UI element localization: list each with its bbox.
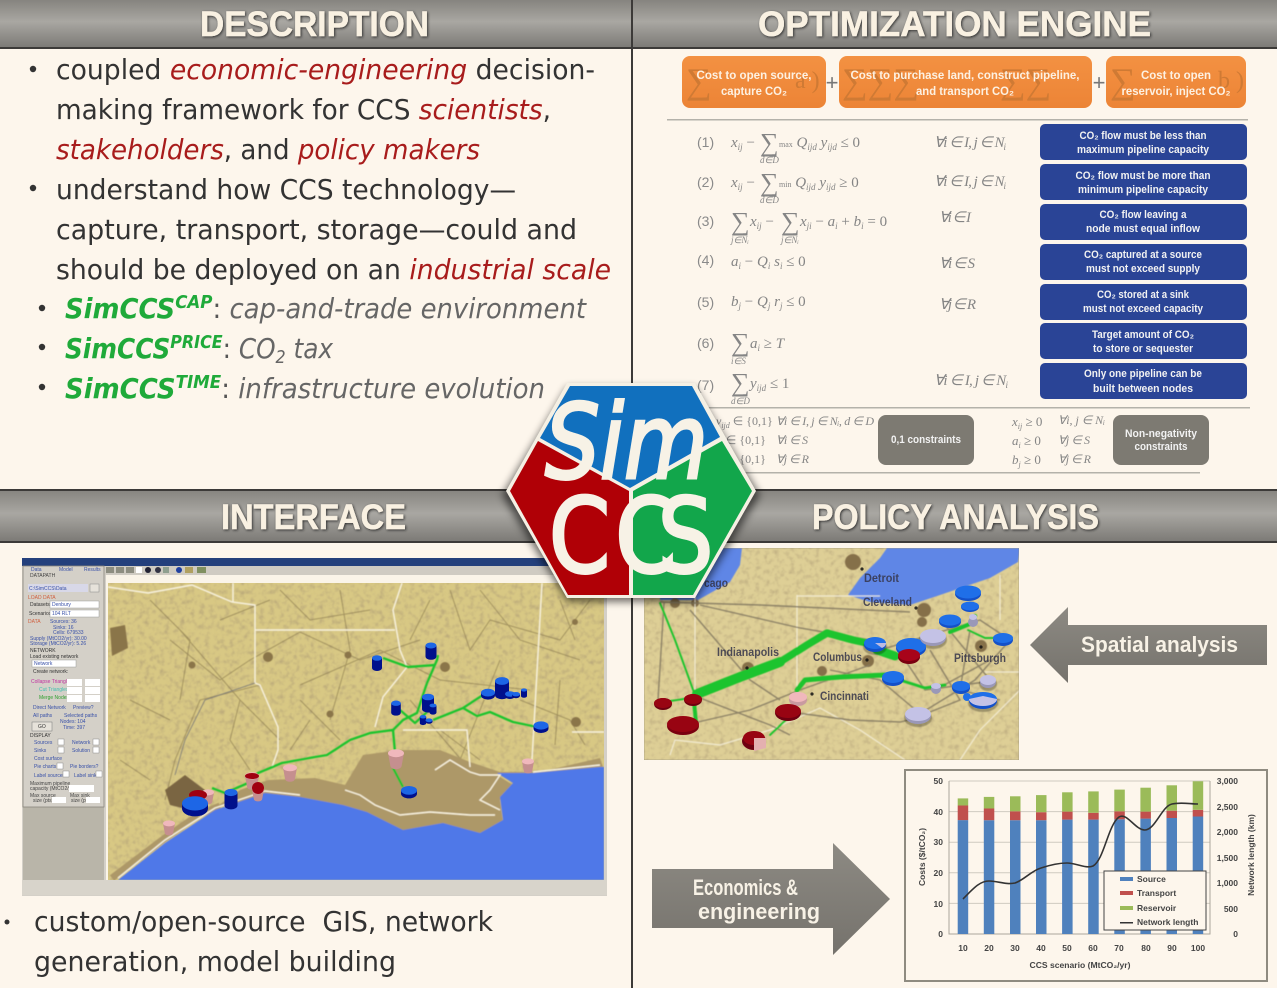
control panel: Pie charts xyxy=(34,764,57,770)
constraint equations: ji xyxy=(806,221,812,231)
axis titles: CCS scenario (MtCO₂/yr) xyxy=(1030,960,1131,970)
control panel: Pie borders? xyxy=(70,764,99,770)
constraint equations: s xyxy=(770,254,780,270)
left axis labels: 40 xyxy=(934,807,943,817)
constraint equations: ≤ 0 xyxy=(782,254,806,270)
control panel: Sources xyxy=(34,740,53,746)
constraint equations: b xyxy=(731,294,738,310)
control panel: size (pts): xyxy=(33,798,55,804)
constraint equations: i xyxy=(835,221,838,231)
constraint explanation boxes: CO₂ captured at a source xyxy=(1084,249,1202,261)
control panel: Solution xyxy=(72,748,90,754)
control panel: Cut Triangles xyxy=(39,687,69,693)
binary and non-negativity constraints: x xyxy=(1012,414,1018,429)
constraint equations: x xyxy=(750,214,757,230)
control panel: Denbury xyxy=(52,602,71,608)
control panel: Preview? xyxy=(73,705,94,711)
objective function cost boxes: ∑∑∑ xyxy=(842,61,919,101)
binary and non-negativity constraints: i xyxy=(721,440,723,449)
constraint equations: ∀i ∈ I, j ∈ N xyxy=(934,373,1006,389)
panel: description text: CO xyxy=(239,332,276,365)
header bar: policy analysis xyxy=(633,489,1277,543)
control panel: Sources: 36 xyxy=(50,619,77,625)
control panel: Max sink xyxy=(70,793,90,799)
objective function cost boxes: + xyxy=(1093,70,1105,95)
panel: description text: coupled economic-engineering decision- xyxy=(56,53,595,86)
control panel: Load existing network xyxy=(30,654,79,660)
constraint equations: j∈Nᵢ xyxy=(780,235,799,245)
legend: Reservoir xyxy=(1137,903,1177,913)
objective function cost boxes: ∑ xyxy=(686,61,712,101)
binary and non-negativity constraints: s xyxy=(716,433,721,447)
control panel: Time: 397 xyxy=(63,725,85,731)
constraint equations: ≥ 0 xyxy=(836,175,859,191)
constraint explanation boxes: maximum pipeline capacity xyxy=(1077,144,1210,156)
control panel: LOAD DATA xyxy=(28,595,56,601)
constraint equations: ijd xyxy=(827,142,837,152)
control panel: DISPLAY xyxy=(30,733,51,739)
axis titles xyxy=(917,814,1256,970)
stacked bars xyxy=(958,781,1203,934)
constraint equations: max Q xyxy=(779,135,807,151)
control panel: Results xyxy=(84,567,101,573)
right axis labels: 2,000 xyxy=(1217,827,1238,837)
control panel: capacity (MtCO2/yr): xyxy=(30,786,76,792)
right axis labels: 1,000 xyxy=(1217,878,1238,888)
arrow: spatial analysis xyxy=(1030,607,1267,683)
constraint equations: ∀i ∈ I, j ∈ N xyxy=(934,174,1004,190)
arrow: economics and engineering: engineering xyxy=(698,899,820,924)
control panel: Network xyxy=(72,740,91,746)
control panel: Merge Nodes xyxy=(39,695,70,701)
constraint explanation boxes: node must equal inflow xyxy=(1086,223,1200,235)
constraint equations: ij xyxy=(757,221,762,231)
constraint equations: ≤ 0 xyxy=(837,135,860,151)
constraint equations: y xyxy=(750,376,757,392)
constraint explanation boxes: CO₂ flow leaving a xyxy=(1100,209,1187,221)
logo wordmark: CCS xyxy=(549,476,713,597)
panel: description text: : xyxy=(223,332,239,365)
constraint equations: a xyxy=(750,336,758,352)
constraint equations: ∑ xyxy=(731,368,750,397)
right axis labels: 3,000 xyxy=(1217,776,1238,786)
source and sink markers xyxy=(163,642,548,835)
control panel: Selected paths xyxy=(64,713,98,719)
legend: Network length xyxy=(1137,917,1198,927)
constraint equations: ij xyxy=(738,142,743,152)
binary and non-negativity constraints: ∀j ∈ R xyxy=(776,452,810,466)
binary and non-negativity constraints: ≥ 0 xyxy=(1022,414,1042,429)
legend: Source xyxy=(1137,874,1166,884)
control panel: Data xyxy=(31,567,42,573)
panel: description text: capture, transport, storage—could and xyxy=(56,213,577,246)
constraint equations: − xyxy=(741,254,757,270)
objective function cost boxes: ∑∑ xyxy=(1000,61,1051,101)
interface description text xyxy=(4,905,494,978)
constraint equations xyxy=(697,128,1008,406)
cost label: reservoir: Cost to open xyxy=(1141,68,1211,82)
constraint equations: min Q xyxy=(779,175,806,191)
control panel: Storage (MtCO2/yr): 5.26 xyxy=(30,641,86,647)
control panel: DATA xyxy=(28,619,41,625)
constraint equations: i xyxy=(1003,181,1006,191)
binary and non-negativity constraints: a xyxy=(1012,433,1018,448)
constraint equations: ij xyxy=(738,182,743,192)
constraint equations: − xyxy=(762,214,774,230)
control panel: Supply (MtCO2/yr): 30.00 xyxy=(30,636,87,642)
binary and non-negativity constraints: ijd xyxy=(721,421,731,430)
panel: description text: making framework for CCS scientists, xyxy=(56,93,551,126)
binary and non-negativity constraints: ∀i ∈ S xyxy=(776,433,808,447)
control panel: Create network: xyxy=(33,669,68,675)
control panel: DATAPATH xyxy=(30,573,56,579)
objective function cost boxes: a ) xyxy=(795,68,820,94)
binary and non-negativity constraints: ≥ 0 xyxy=(1021,433,1041,448)
x axis labels: 100 xyxy=(1191,943,1205,953)
non-negativity constraints box: constraints xyxy=(1134,441,1188,453)
constraint equations: (1) xyxy=(697,134,714,150)
panel: description text: TIME xyxy=(176,372,222,393)
x axis labels: 90 xyxy=(1167,943,1177,953)
panel: description text: understand how CCS technology— xyxy=(56,173,516,206)
constraint explanation boxes: built between nodes xyxy=(1093,383,1193,395)
constraint equations: ∀i ∈ I xyxy=(939,210,972,226)
panel: description text: SimCCS xyxy=(65,372,176,405)
constraint equations: (5) xyxy=(697,294,714,310)
constraint equations: x xyxy=(731,135,738,151)
constraint equations: x xyxy=(800,214,807,230)
control panel: GO xyxy=(38,724,46,730)
constraint equations: ∀j ∈ R xyxy=(939,297,976,313)
control panel: Cells: 679533 xyxy=(53,630,84,636)
control panel: All paths xyxy=(33,713,53,719)
constraint equations: j∈Nᵢ xyxy=(730,235,749,245)
constraint equations: d∈D xyxy=(760,195,779,205)
right axis labels: 2,500 xyxy=(1217,802,1238,812)
axis titles: Costs ($/tCO₂) xyxy=(917,828,927,886)
arrow: economics and engineering: Economics & xyxy=(693,875,798,900)
map: spatial analysis Ohio valley xyxy=(643,547,1020,761)
control panel: Network xyxy=(34,661,53,667)
left axis labels: 30 xyxy=(934,837,943,847)
heading: interface: INTERFACE xyxy=(221,498,406,537)
x axis labels: 20 xyxy=(984,943,994,953)
x axis labels: 70 xyxy=(1114,943,1124,953)
x axis labels: 60 xyxy=(1088,943,1098,953)
panel: description text xyxy=(30,53,611,405)
logo wordmark xyxy=(545,383,713,597)
constraint equations: + xyxy=(838,214,854,230)
constraint equations: i xyxy=(738,261,742,271)
control panel xyxy=(23,566,104,807)
x axis labels: 10 xyxy=(958,943,968,953)
city labels: Indianapolis xyxy=(717,645,779,659)
control panel: Label sources xyxy=(34,773,66,779)
map: Gulf Coast network xyxy=(108,583,604,880)
control panel: 104 RLT xyxy=(52,611,71,617)
constraint equations: ≤ 0 xyxy=(782,294,806,310)
constraint equations: ∀i ∈ I, j ∈ N xyxy=(934,135,1004,151)
objective function cost boxes: + xyxy=(826,70,838,95)
heading: optimization engine: OPTIMIZATION ENGINE xyxy=(758,5,1151,44)
constraint equations: − xyxy=(812,214,828,230)
constraint explanation boxes: to store or sequester xyxy=(1093,343,1194,355)
binary and non-negativity constraints: ∀i ∈ I, j ∈ Nᵢ, d ∈ D xyxy=(776,414,874,428)
binary and non-negativity constraints: ∀j ∈ S xyxy=(1058,433,1090,447)
city labels: Detroit xyxy=(864,571,899,585)
constraint explanation boxes: CO₂ flow must be more than xyxy=(1076,170,1211,182)
control panel: NETWORK xyxy=(30,648,56,654)
network length line xyxy=(963,803,1198,899)
constraint equations: i xyxy=(780,261,783,271)
control panel: C:\SimCCS\Data xyxy=(29,586,67,592)
city labels: Pittsburgh xyxy=(954,651,1006,665)
constraint equations: j xyxy=(779,301,783,311)
arrow: economics and engineering xyxy=(652,843,890,955)
panel: description text: PRICE xyxy=(170,332,223,353)
x axis labels: 40 xyxy=(1036,943,1046,953)
constraint explanation boxes xyxy=(1040,124,1247,399)
control panel: Direct Network xyxy=(33,705,66,711)
panel: description text: tax xyxy=(286,332,333,365)
left axis labels: 10 xyxy=(934,899,943,909)
constraint equations: a xyxy=(828,214,835,230)
constraint equations: d∈D xyxy=(760,155,779,165)
constraint equations: = 0 xyxy=(864,214,887,230)
constraint equations: y xyxy=(816,175,826,191)
city labels xyxy=(704,567,1006,703)
panel: description text: : xyxy=(221,372,238,405)
binary and non-negativity constraints: j xyxy=(1018,460,1022,469)
constraint equations: (3) xyxy=(697,213,714,229)
panel: description text: should be deployed on an industrial scale xyxy=(56,253,611,286)
left axis labels: 50 xyxy=(934,776,943,786)
panel: description text: cap-and-trade environment xyxy=(229,292,587,325)
city labels: Cincinnati xyxy=(820,689,869,703)
objective function cost boxes xyxy=(682,56,1246,108)
heading: description: DESCRIPTION xyxy=(200,5,429,44)
control panel: Model xyxy=(59,567,73,573)
constraint equations: Q xyxy=(757,254,768,270)
constraint equations: ijd xyxy=(806,182,816,192)
binary and non-negativity constraints: j xyxy=(720,459,724,468)
city labels: cago xyxy=(704,576,728,590)
constraint equations: ∑ xyxy=(781,207,800,236)
constraint equations: − xyxy=(743,175,755,191)
constraint equations: i xyxy=(1005,380,1008,390)
vertical divider xyxy=(631,0,633,988)
right axis labels xyxy=(1217,776,1238,939)
panel: description text: : xyxy=(212,292,229,325)
constraint equations: x xyxy=(731,175,738,191)
header bar: interface xyxy=(0,489,632,543)
0,1 constraints box: 0,1 constraints xyxy=(891,434,961,446)
panel: description text: SimCCS xyxy=(65,292,175,325)
arrow: spatial analysis: Spatial analysis xyxy=(1081,632,1238,657)
interface description text: generation, model building xyxy=(34,945,396,978)
chart: costs and network length xyxy=(905,770,1267,981)
axis titles: Network length (km) xyxy=(1246,814,1256,896)
city labels: Cleveland xyxy=(863,595,912,609)
constraint equations: − xyxy=(741,294,757,310)
panel: description text: SimCCS xyxy=(65,332,170,365)
constraint equations: y xyxy=(817,135,828,151)
constraint explanation boxes: must not exceed supply xyxy=(1086,263,1201,275)
constraint equations: j xyxy=(767,301,771,311)
binary and non-negativity constraints xyxy=(715,413,1209,469)
control panel: Collapse Triangles xyxy=(31,679,73,685)
heading: policy analysis: POLICY ANALYSIS xyxy=(812,498,1099,537)
control panel: Maximum pipeline xyxy=(30,781,71,787)
constraint equations: ∑ xyxy=(760,128,779,157)
constraint explanation boxes: CO₂ stored at a sink xyxy=(1097,289,1190,301)
control panel: Label sinks xyxy=(74,773,100,779)
panel: description text: stakeholders, and policy makers xyxy=(56,133,480,166)
0,1 constraints box xyxy=(878,415,974,465)
header bar: optimization engine xyxy=(633,0,1277,49)
right axis labels: 1,500 xyxy=(1217,853,1238,863)
objective function cost boxes: b ) xyxy=(1218,68,1244,94)
constraint equations: (2) xyxy=(697,174,714,190)
constraint equations: ∑ xyxy=(731,328,750,357)
blue segment xyxy=(540,386,720,488)
control panel: Datasets: xyxy=(30,602,51,608)
constraint equations: − xyxy=(743,135,755,151)
constraint explanation boxes: minimum pipeline capacity xyxy=(1078,184,1209,196)
constraint explanation boxes: must not exceed capacity xyxy=(1083,303,1204,315)
non-negativity constraints box xyxy=(1113,415,1209,465)
constraint equations: T xyxy=(776,336,784,352)
x axis labels: 30 xyxy=(1010,943,1020,953)
logo: SimCCS hexagon xyxy=(502,383,760,602)
control panel: Sinks xyxy=(34,748,47,754)
control panel: Nodes: 104 xyxy=(60,719,86,725)
cost label: source: Cost to open source, xyxy=(696,68,812,82)
cost label: pipeline: Cost to purchase land, construct pipeline, xyxy=(850,68,1080,82)
binary and non-negativity constraints: ∈ {0,1} xyxy=(723,433,766,447)
constraint equations: r xyxy=(770,294,780,310)
constraint equations: ijd xyxy=(757,383,767,393)
binary and non-negativity constraints: i xyxy=(1018,441,1021,450)
constraint explanation boxes: Only one pipeline can be xyxy=(1084,368,1202,380)
constraint equations: (4) xyxy=(697,252,714,268)
constraint equations: i xyxy=(861,221,864,231)
objective function cost boxes: ∑ xyxy=(1110,61,1136,101)
binary and non-negativity constraints: ∈ {0,1} xyxy=(730,414,773,428)
panel: description text: infrastructure evolution xyxy=(238,372,545,405)
constraint equations: ∑ xyxy=(760,168,779,197)
binary and non-negativity constraints: ij xyxy=(1018,422,1023,431)
non-negativity constraints box: Non-negativity xyxy=(1125,428,1198,440)
left axis labels xyxy=(934,776,943,939)
binary and non-negativity constraints: ∀i, j ∈ Nᵢ xyxy=(1058,413,1105,427)
logo wordmark: Sim xyxy=(545,383,708,503)
constraint equations: ≥ xyxy=(760,336,776,352)
control panel: Scenarios: xyxy=(29,611,53,617)
constraint equations: Q xyxy=(757,294,768,310)
toolbar icons xyxy=(106,567,206,573)
constraint equations: i xyxy=(758,343,760,353)
constraint equations: b xyxy=(854,214,861,230)
binary and non-negativity constraints: b xyxy=(1012,452,1018,467)
constraint explanation boxes: CO₂ flow must be less than xyxy=(1080,130,1207,142)
map markers xyxy=(654,586,1013,751)
software interface screenshot xyxy=(22,558,607,896)
left axis labels: 0 xyxy=(938,929,943,939)
objective function cost boxes: capture CO₂ xyxy=(721,84,787,98)
interface description text: custom/open-source GIS, network xyxy=(34,905,494,938)
control panel: Max source xyxy=(30,793,56,799)
green segment xyxy=(633,441,752,595)
constraint equations: i∈S xyxy=(731,356,746,366)
binary and non-negativity constraints: y xyxy=(716,414,721,428)
header bar: description xyxy=(0,0,632,49)
control panel: Sinks: 16 xyxy=(53,625,74,631)
binary and non-negativity constraints: r xyxy=(716,452,721,466)
constraint equations: ijd xyxy=(807,142,817,152)
x axis labels xyxy=(958,943,1205,953)
legend: Transport xyxy=(1137,888,1176,898)
constraint equations: (7) xyxy=(697,377,714,393)
constraint equations: j xyxy=(738,301,742,311)
constraint equations: d∈D xyxy=(731,396,750,406)
constraint equations: (6) xyxy=(697,335,714,351)
constraint equations: i xyxy=(1003,142,1006,152)
constraint equations: a xyxy=(731,254,738,270)
city labels: Columbus xyxy=(813,650,862,664)
constraint equations: ijd xyxy=(826,182,836,192)
binary and non-negativity constraints: ≥ 0 xyxy=(1021,452,1041,467)
binary and non-negativity constraints: ∀j ∈ R xyxy=(1058,452,1092,466)
control panel: size (pts): xyxy=(71,798,93,804)
binary and non-negativity constraints: ∈ {0,1} xyxy=(723,452,766,466)
constraint explanation boxes: Target amount of CO₂ xyxy=(1092,329,1194,341)
legend xyxy=(1104,871,1206,930)
left axis labels: 20 xyxy=(934,868,943,878)
constraint equations: ≤ 1 xyxy=(766,376,789,392)
control panel: Cost surface xyxy=(34,756,62,762)
constraint equations: ∀i ∈ S xyxy=(939,256,976,272)
x axis labels: 80 xyxy=(1141,943,1151,953)
objective function cost boxes: reservoir, inject CO₂ xyxy=(1122,84,1230,98)
red segment xyxy=(510,441,629,595)
right axis labels: 0 xyxy=(1233,929,1238,939)
constraint equations: ∑ xyxy=(731,207,750,236)
panel: description text: CAP xyxy=(175,292,212,313)
right axis labels: 500 xyxy=(1224,904,1238,914)
panel: description text: 2 xyxy=(276,347,286,368)
x axis labels: 50 xyxy=(1062,943,1072,953)
objective function cost boxes: and transport CO₂ xyxy=(916,84,1014,98)
constraint equations: i xyxy=(768,261,771,271)
